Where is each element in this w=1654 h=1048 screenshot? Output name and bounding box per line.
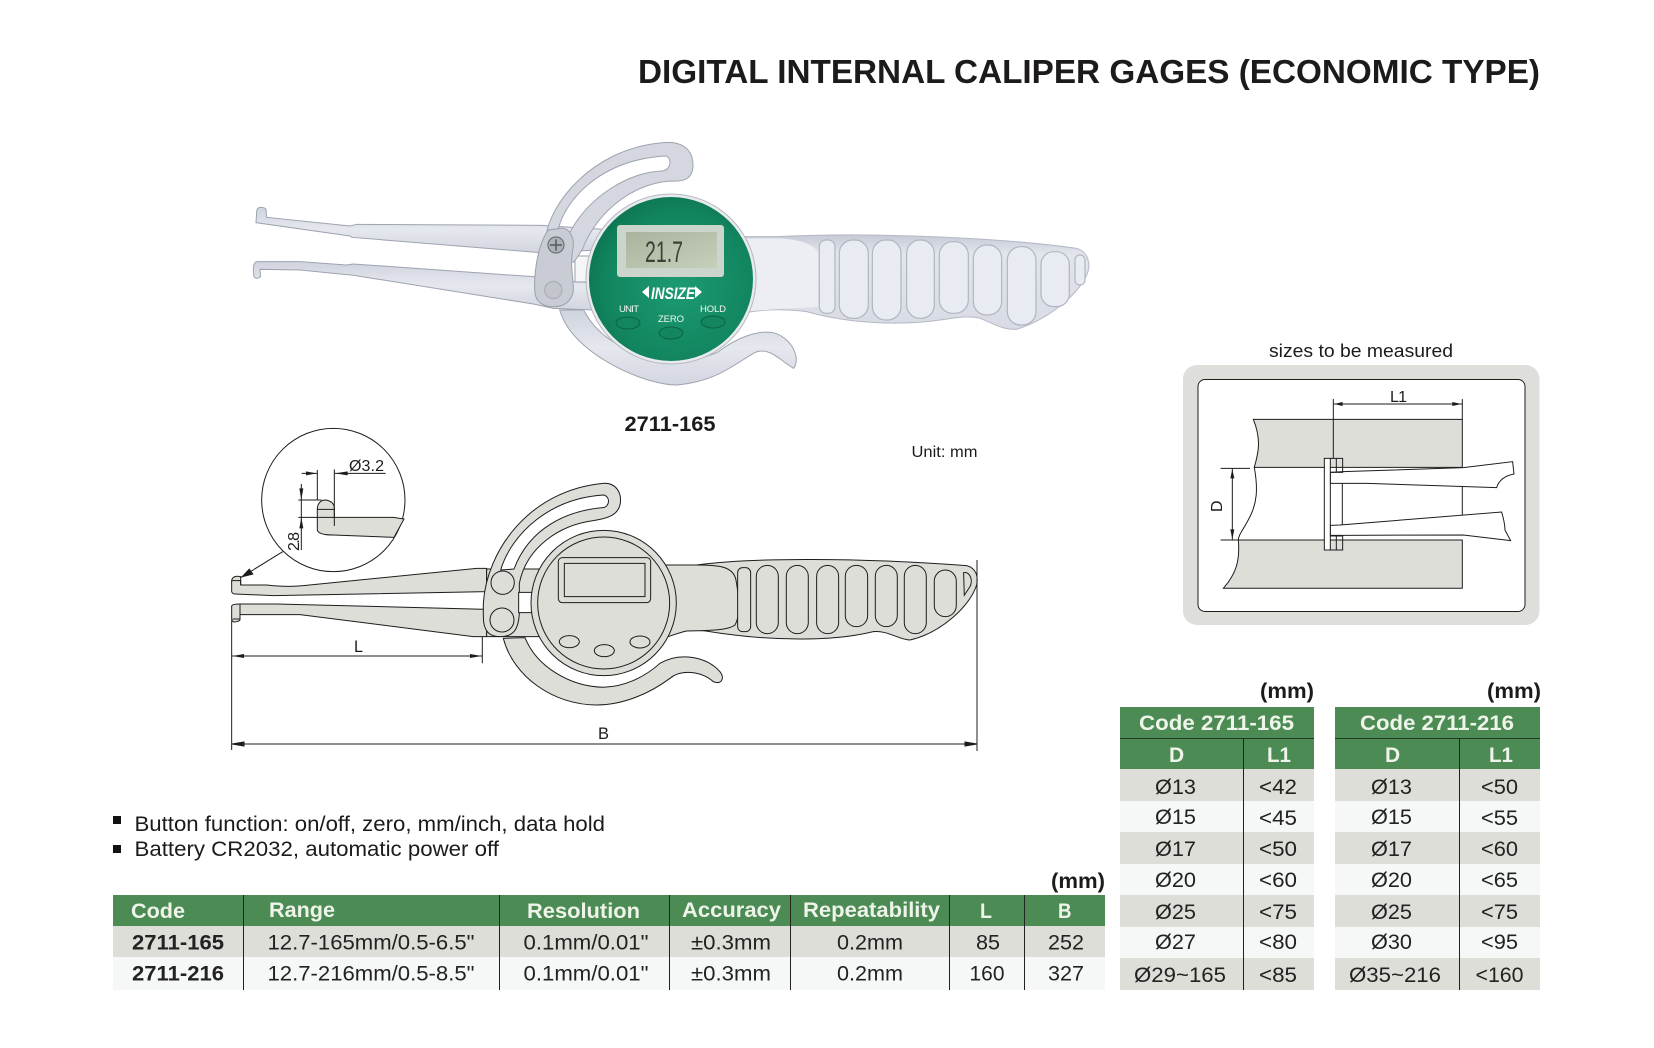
- table rows: Ø27: [1155, 931, 1196, 954]
- table row: 2711-216: 160: [970, 962, 1004, 986]
- table rows: Ø20: [1155, 869, 1196, 892]
- drawing: tip height label: 2.8: [286, 532, 303, 551]
- unit label: (mm): [1260, 680, 1314, 703]
- table row: 2711-216: 12.7-216mm/0.5-8.5": [268, 962, 474, 986]
- table row: 2711-216: 0.1mm/0.01": [524, 962, 648, 986]
- table rows: <95: [1481, 931, 1518, 954]
- unit label: (mm): [1051, 870, 1105, 893]
- table rows: Ø13: [1371, 776, 1412, 799]
- photo: INSIZE logo: INSIZE: [651, 284, 696, 303]
- table rows: <55: [1481, 807, 1518, 830]
- diagram: workpiece lower block: [1223, 540, 1462, 588]
- table row: 2711-165: 85: [976, 932, 1000, 954]
- table rows: Ø17: [1371, 838, 1412, 861]
- table row: 2711-165: ±0.3mm: [691, 932, 771, 954]
- product photo: digital caliper: [253, 142, 1089, 385]
- table header: Code 2711-216: [1360, 712, 1514, 735]
- drawing: dial outline: [531, 530, 676, 676]
- diagram: D dimension: [1221, 468, 1250, 540]
- drawing: tip detail circle: [241, 428, 405, 578]
- table rows: <50: [1259, 838, 1297, 861]
- panel: measured sizes diagram: [1183, 365, 1540, 625]
- drawing: gauge body: [483, 483, 977, 705]
- table header: Repeatability: [803, 899, 940, 922]
- table rows: Ø29~165: [1134, 964, 1226, 987]
- table header: Code 2711-165: [1139, 712, 1294, 735]
- table header: D: [1169, 744, 1184, 767]
- diagram: caliper jaws in bore: [1330, 462, 1514, 488]
- table rows: Ø30: [1371, 931, 1412, 954]
- table row: 2711-216: ±0.3mm: [691, 962, 771, 986]
- table rows: <42: [1259, 776, 1297, 799]
- table rows: <65: [1481, 869, 1518, 892]
- main specification table: [113, 870, 1105, 990]
- table row: 2711-165: [113, 926, 1105, 957]
- table header: Range: [269, 899, 335, 922]
- diagram: workpiece upper block: [1253, 419, 1462, 467]
- table rows: Ø17: [1155, 838, 1196, 861]
- photo: lower jaw: [253, 262, 593, 310]
- drawing: dimension B: B: [598, 724, 609, 743]
- table rows: [1120, 769, 1314, 990]
- table header: [113, 895, 1105, 926]
- photo: dial buttons: ZERO: [658, 314, 684, 325]
- table rows: Ø13: [1155, 776, 1196, 799]
- feature list: [113, 813, 605, 861]
- drawing: handle: [663, 559, 977, 640]
- photo: handle with grip slots: [740, 235, 1089, 329]
- table row: 2711-216: 327: [1048, 962, 1084, 986]
- table header: L: [980, 900, 992, 923]
- table header: D: [1385, 744, 1400, 767]
- drawing: dimension L: [232, 620, 482, 750]
- photo: dial buttons: UNIT: [619, 304, 639, 315]
- table rows: <60: [1481, 838, 1518, 861]
- table header: Resolution: [527, 900, 640, 923]
- drawing: jaws: [232, 568, 487, 637]
- photo: pivot window: [575, 256, 590, 282]
- table rows: Ø15: [1155, 806, 1196, 829]
- table header: L1: [1267, 744, 1291, 767]
- photo: upper jaw: [256, 207, 603, 252]
- drawing: lower finger rest: [503, 638, 722, 705]
- unit note: Unit: mm: [912, 444, 978, 461]
- bullet: battery: Battery CR2032, automatic power off: [134, 838, 499, 861]
- technical line drawing: [232, 428, 977, 751]
- table: code 2711-216 sizes: [1335, 680, 1541, 990]
- table header: [1335, 707, 1540, 769]
- diagram: D label: D: [1209, 500, 1226, 512]
- table row: 2711-165: 12.7-165mm/0.5-6.5": [268, 932, 474, 954]
- table header: Code: [131, 900, 185, 923]
- table row: 2711-165: 0.1mm/0.01": [524, 932, 648, 954]
- drawing: tip diameter label: Ø3.2: [349, 458, 384, 475]
- table row: 2711-165: 252: [1048, 932, 1084, 954]
- table rows: Ø20: [1371, 869, 1412, 892]
- table rows: <45: [1259, 807, 1297, 830]
- table rows: <85: [1259, 964, 1297, 987]
- table header: [1120, 707, 1314, 769]
- photo: dial buttons: HOLD: [700, 304, 726, 315]
- table rows: [1335, 769, 1540, 990]
- photo: upper curved bow: [546, 142, 693, 262]
- diagram: L1 label: L1: [1390, 389, 1407, 406]
- bullet: button function: Button function: on/off, zero, mm/inch, data hold: [134, 813, 605, 836]
- table rows: <75: [1259, 901, 1297, 924]
- table row: 2711-165: 2711-165: [132, 932, 224, 954]
- title: DIGITAL INTERNAL CALIPER GAGES (ECONOMIC TYPE): [638, 54, 1540, 91]
- unit label: (mm): [1487, 680, 1541, 703]
- photo: dial buttons: [616, 304, 726, 339]
- table rows: <160: [1476, 964, 1524, 987]
- table rows: Ø15: [1371, 806, 1412, 829]
- table rows: <50: [1481, 776, 1518, 799]
- table rows: Ø35~216: [1349, 964, 1441, 987]
- table: code 2711-165 sizes: [1120, 680, 1314, 990]
- photo: pivot link plate: [535, 228, 573, 307]
- table row: 2711-165: 0.2mm: [837, 932, 903, 954]
- drawing: dimension L: L: [354, 637, 363, 656]
- caption: sizes to be measured: sizes to be measured: [1269, 340, 1453, 361]
- table row: 2711-216: 0.2mm: [837, 962, 903, 986]
- table header: L1: [1489, 744, 1513, 767]
- table rows: Ø25: [1155, 901, 1196, 924]
- photo: LCD display: [617, 225, 724, 277]
- table row: 2711-216: 2711-216: [132, 962, 224, 986]
- table row: 2711-216: [113, 957, 1105, 990]
- table rows: <60: [1259, 869, 1297, 892]
- table header: Accuracy: [682, 899, 781, 922]
- drawing: upper bow and pivot plate: [483, 483, 621, 637]
- drawing: dimension B: [232, 560, 977, 751]
- photo: LCD display: 21.7: [645, 236, 683, 269]
- table rows: <75: [1481, 901, 1518, 924]
- diagram: L1 dimension: [1333, 399, 1462, 458]
- photo: digital dial: [586, 194, 756, 364]
- photo: lower curved finger rest: [560, 310, 796, 385]
- model label: 2711-165: [624, 413, 716, 436]
- table rows: Ø25: [1371, 901, 1412, 924]
- table rows: <80: [1259, 931, 1297, 954]
- table header: B: [1058, 900, 1072, 923]
